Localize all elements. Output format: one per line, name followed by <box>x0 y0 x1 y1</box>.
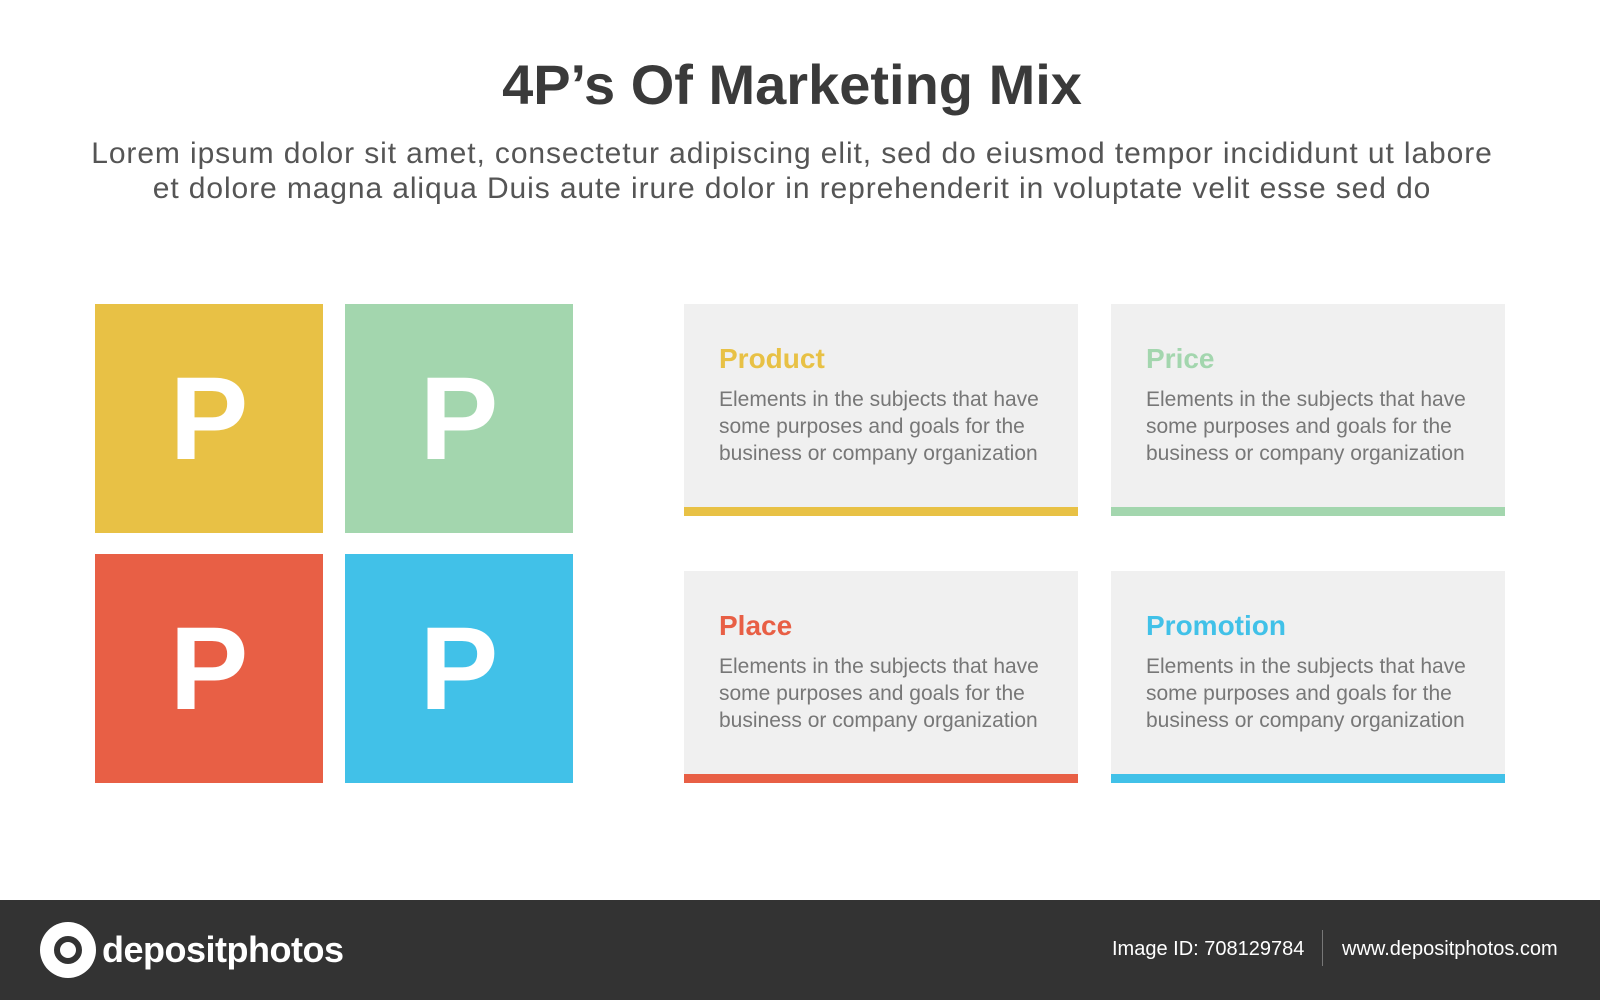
card: Promotion <box>1111 571 1505 783</box>
card: Price <box>1111 304 1505 516</box>
subtitle: Lorem ipsum dolor sit amet, consectetur adipiscing elit, sed do eiusmod tempor incididunt ut labore <box>91 137 1493 170</box>
card: Price: Elements in the subjects that have some purposes and goals for the business or company organization <box>1146 388 1466 465</box>
square: blue P: P <box>420 602 498 734</box>
card: Product: Product <box>719 343 825 374</box>
square: red P: P <box>170 602 248 734</box>
square: yellow P: P <box>170 352 248 484</box>
card: Place <box>684 571 1078 783</box>
title: 4P’s Of Marketing Mix <box>502 53 1082 116</box>
card: Promotion: Elements in the subjects that have some purposes and goals for the business or company organization <box>1146 655 1466 732</box>
subtitle <box>91 137 1493 205</box>
card: Place: Place <box>719 610 792 641</box>
card: Price: Price <box>1146 343 1214 374</box>
card: Product: Elements in the subjects that have some purposes and goals for the business or company organization <box>719 388 1039 465</box>
footer url <box>1322 930 1323 966</box>
card: Place: Elements in the subjects that have some purposes and goals for the business or company organization <box>719 655 1039 732</box>
P grid <box>95 304 573 783</box>
card: Promotion: Promotion <box>1146 610 1286 641</box>
card: Product <box>684 304 1078 516</box>
footer <box>0 900 1600 1000</box>
footer logo: depositphotos <box>102 929 343 970</box>
square: blue P <box>345 554 573 783</box>
subtitle: et dolore magna aliqua Duis aute irure dolor in reprehenderit in voluptate velit esse sed do <box>153 172 1431 205</box>
footer logo <box>40 922 343 978</box>
footer image id: Image ID: 708129784 <box>1112 938 1304 960</box>
square: yellow P <box>95 304 323 533</box>
square: green P <box>345 304 573 533</box>
footer: www.depositphotos.com <box>1342 938 1558 960</box>
square: red P <box>95 554 323 783</box>
square: green P: P <box>420 352 498 484</box>
